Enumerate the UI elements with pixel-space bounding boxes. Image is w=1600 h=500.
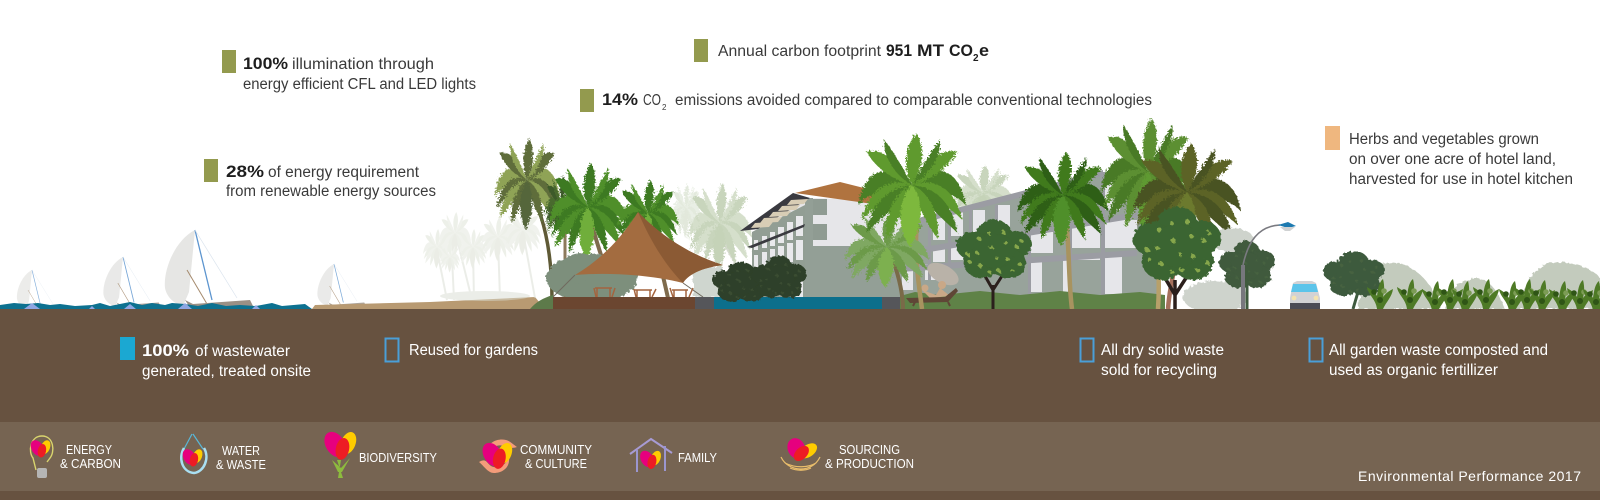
- car: [1290, 281, 1320, 309]
- sun lounger with umbrella: [906, 258, 962, 306]
- tent canopy: [553, 212, 723, 297]
- dark street tree: [1219, 241, 1275, 309]
- dark roadside tree: [1323, 251, 1385, 309]
- legend: community and culture: & CULTURE: [525, 457, 587, 471]
- dark bushes: [712, 256, 806, 302]
- icon: water drop: [180, 434, 206, 473]
- structural beams: [900, 170, 1137, 295]
- foreground palms: [844, 118, 1241, 309]
- legend: water and waste: WATER: [222, 444, 260, 458]
- callout: garden waste: All garden waste composted and: [1329, 342, 1548, 359]
- callout: carbon footprint: CO: [949, 41, 973, 60]
- pool deck and pool: [553, 297, 900, 309]
- callout: wastewater: 100%: [142, 341, 189, 360]
- far faded palms: [671, 165, 1014, 280]
- shrub by deck: [530, 295, 553, 309]
- callout: dry solid waste: All dry solid waste: [1101, 342, 1224, 359]
- callout: herbs and vegetables: harvested for use in hotel kitchen: [1349, 171, 1573, 188]
- legend: energy and carbon: ENERGY: [66, 443, 113, 457]
- callout: renewable energy: [204, 159, 436, 200]
- callout: carbon footprint: 951: [886, 41, 912, 60]
- callout: illumination: 100%: [243, 54, 288, 73]
- brown roof: [795, 182, 945, 208]
- callout: renewable energy: of energy requirement: [268, 164, 420, 181]
- icon: house: [630, 439, 672, 472]
- icon: nest: [778, 433, 823, 470]
- callout: reused for gardens: Reused for gardens: [409, 342, 538, 359]
- legend: water and waste: [180, 434, 266, 473]
- callout: herbs and vegetables: [1325, 126, 1573, 188]
- legend: sourcing and production: & PRODUCTION: [825, 457, 914, 471]
- callout: garden waste: [1310, 338, 1548, 379]
- callout: emissions avoided: [580, 89, 1152, 112]
- callout: emissions avoided: emissions avoided compared to comparable conventional technologies: [675, 92, 1152, 109]
- faded trees behind tent: [546, 253, 723, 302]
- callout: emissions avoided: CO: [643, 92, 661, 109]
- callout: emissions avoided: 2: [662, 103, 667, 112]
- callout: herbs and vegetables: on over one acre of hotel land,: [1349, 151, 1556, 168]
- roof slats: [751, 199, 808, 228]
- callout: herbs and vegetables: Herbs and vegetables grown: [1349, 131, 1539, 148]
- callout: carbon footprint: 2: [973, 53, 979, 64]
- callout: carbon footprint: [694, 39, 989, 64]
- sailing boats: [17, 230, 366, 309]
- callout: emissions avoided: 14%: [602, 90, 638, 109]
- callout: wastewater: [120, 337, 311, 380]
- sea waves: [0, 302, 312, 309]
- legend: family: [630, 439, 718, 472]
- callout: illumination: energy efficient CFL and LED lights: [243, 76, 476, 93]
- callout: carbon footprint: Annual carbon footprint: [718, 43, 882, 60]
- windows: [813, 199, 827, 240]
- grass: [900, 291, 1165, 309]
- round green trees: [956, 206, 1221, 309]
- callout: carbon footprint: MT: [917, 41, 945, 60]
- hedge shrubs: [1367, 279, 1600, 311]
- callout: wastewater: generated, treated onsite: [142, 363, 311, 380]
- callout: reused for gardens: [386, 338, 538, 362]
- callout: garden waste: used as organic fertillizer: [1329, 362, 1498, 379]
- hotel main block: [740, 182, 945, 298]
- icon: light bulb: [28, 436, 53, 478]
- callout: wastewater: of wastewater: [195, 343, 290, 360]
- legend: sourcing and production: [778, 433, 914, 471]
- wing wall: [900, 172, 1160, 296]
- beach: [312, 297, 545, 309]
- legend: community and culture: COMMUNITY: [520, 443, 593, 457]
- legend: biodiversity: [320, 428, 438, 478]
- lower wall band: [813, 246, 905, 298]
- legend: sourcing and production: SOURCING: [839, 443, 900, 457]
- callout: dry solid waste: [1080, 338, 1224, 379]
- street lamp: [1241, 222, 1296, 309]
- legend band: [0, 422, 1600, 491]
- footer caption: Environmental Performance 2017: [1358, 468, 1581, 484]
- left wing stripes: [752, 205, 805, 298]
- ground band: [0, 309, 1600, 500]
- back palms by tent: [494, 138, 679, 300]
- legend: water and waste: & WASTE: [216, 458, 266, 472]
- callout: dry solid waste: sold for recycling: [1101, 362, 1217, 379]
- misty background palms: [423, 209, 541, 301]
- hotel wall: [752, 198, 905, 298]
- callout: renewable energy: from renewable energy sources: [226, 183, 436, 200]
- legend: energy and carbon: [28, 436, 121, 478]
- legend: family: FAMILY: [678, 451, 718, 465]
- cafe tables: [594, 288, 693, 297]
- faded tree behind street: [1183, 228, 1254, 313]
- hotel right wing: [900, 170, 1160, 296]
- legend: biodiversity: BIODIVERSITY: [359, 451, 438, 465]
- icon: tree heart: [320, 428, 359, 478]
- dark roof eaves: [740, 193, 810, 231]
- callout: carbon footprint: e: [979, 41, 989, 60]
- callout: illumination: [222, 50, 476, 93]
- scene: coast and hotel landscape: [0, 118, 1600, 313]
- legend: community and culture: [478, 439, 593, 473]
- icon: hands: [478, 439, 517, 473]
- callout: illumination: illumination through: [292, 56, 434, 73]
- faded hedge trees: [1357, 262, 1600, 309]
- balcony panels: [902, 180, 1137, 294]
- legend: energy and carbon: & CARBON: [60, 457, 121, 471]
- callout: renewable energy: 28%: [226, 162, 264, 181]
